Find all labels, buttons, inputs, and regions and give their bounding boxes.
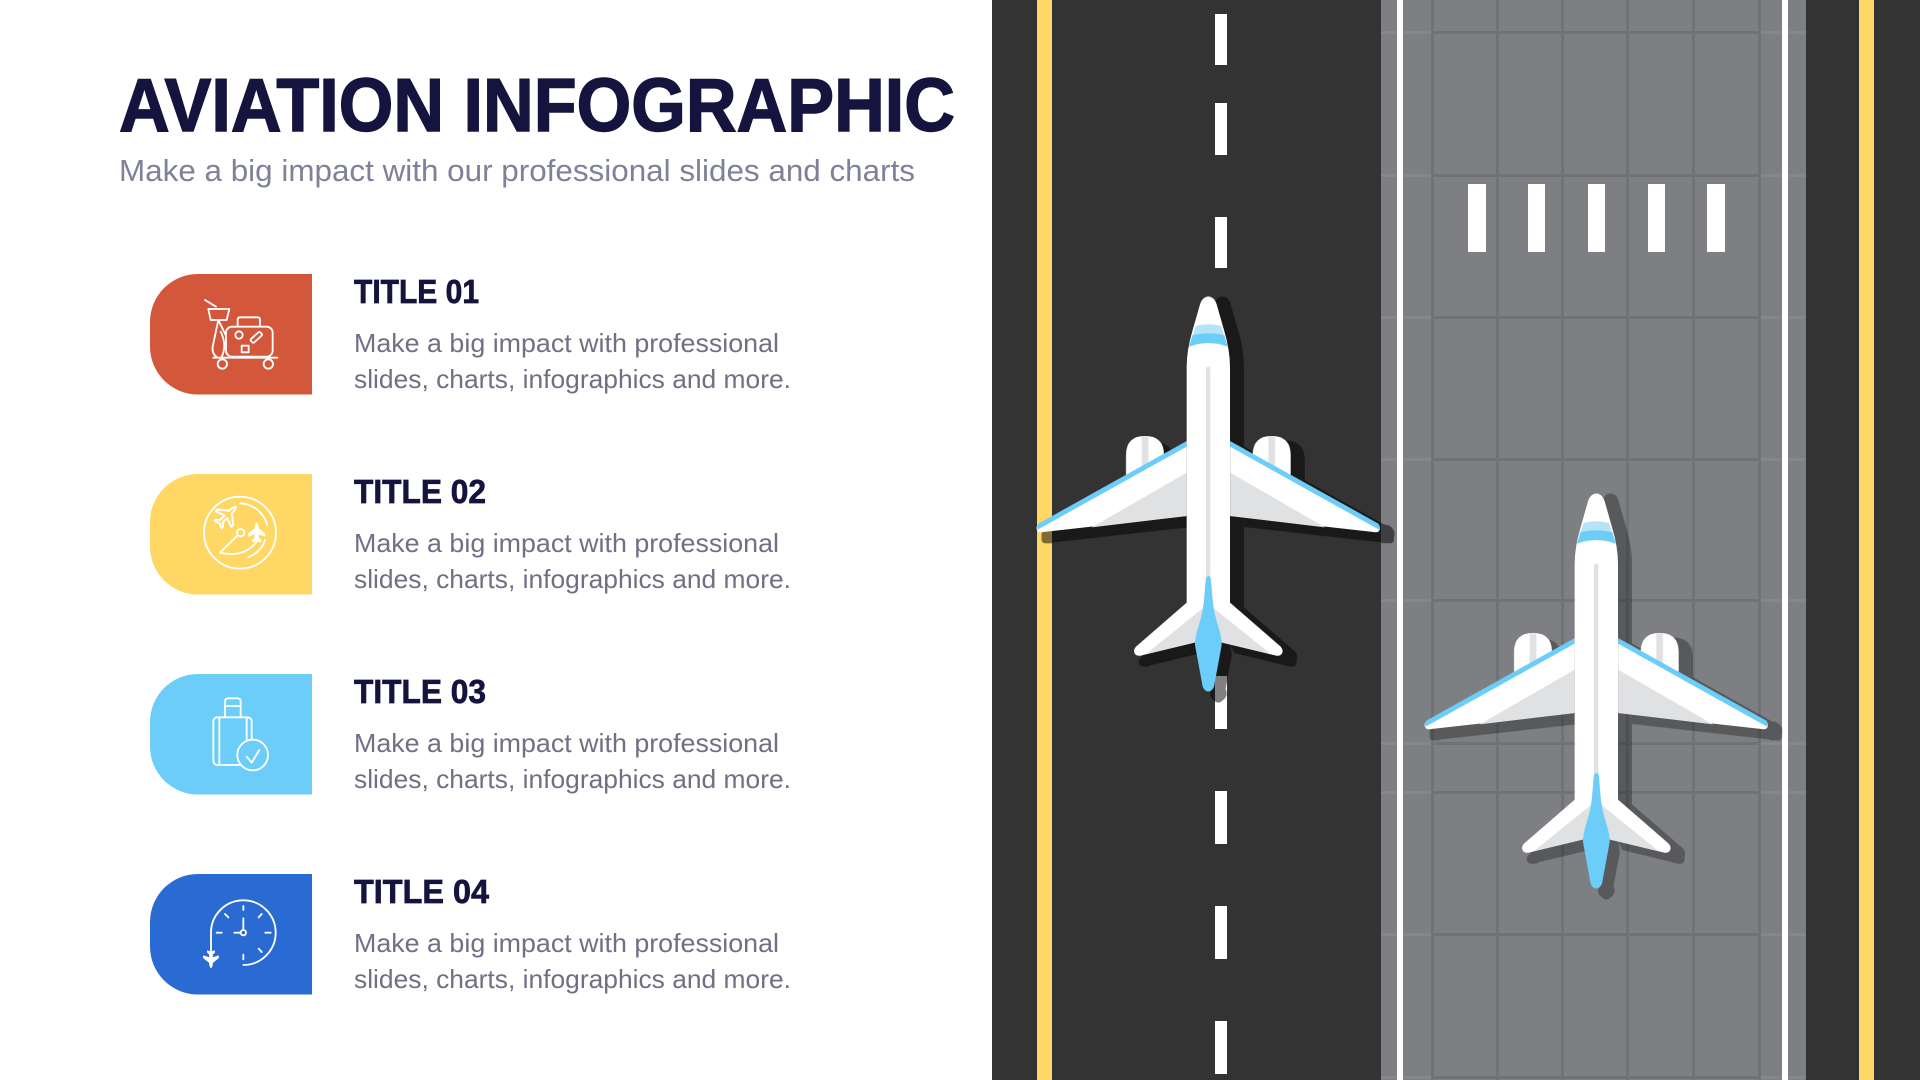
icon: clock with plane path (204, 900, 276, 967)
badge 02 (150, 474, 312, 594)
badge 04 (150, 874, 312, 994)
centre dashes (1215, 14, 1227, 1074)
text 01 line 2: slides, charts, infographics and more. (354, 364, 791, 394)
heading 01: TITLE 01 (354, 273, 479, 310)
text 04 line 2: slides, charts, infographics and more. (354, 964, 791, 994)
text 03 line 2: slides, charts, infographics and more. (354, 764, 791, 794)
yellow edge lines (1037, 0, 1874, 1080)
badge 03 (150, 674, 312, 794)
item 03 (150, 673, 791, 794)
panel: runway scene (992, 0, 1920, 1080)
text 04: Make a big impact with professional (354, 928, 779, 958)
heading 03: TITLE 03 (354, 673, 486, 710)
text 02: Make a big impact with professional (354, 528, 779, 558)
asphalt (992, 0, 1920, 1080)
text 03: Make a big impact with professional (354, 728, 779, 758)
title: AVIATION INFOGRAPHIC (119, 63, 955, 147)
text 02 line 2: slides, charts, infographics and more. (354, 564, 791, 594)
icon: suitcase with check (213, 698, 268, 770)
concrete runway (1381, 0, 1806, 1080)
icon: luggage cart (205, 300, 277, 369)
item 01 (150, 273, 791, 394)
heading 02: TITLE 02 (354, 473, 486, 510)
threshold stripes (1468, 184, 1725, 252)
subtitle: Make a big impact with our professional slides and charts (119, 153, 915, 188)
badge 01 (150, 274, 312, 394)
heading 04: TITLE 04 (354, 873, 490, 910)
text 01: Make a big impact with professional (354, 328, 779, 358)
airplane 1 (1037, 297, 1394, 703)
white edge lines (1397, 0, 1788, 1080)
icon: globe with planes (204, 497, 276, 569)
item 04 (150, 873, 791, 994)
item 02 (150, 473, 791, 594)
airplane 2 (1425, 494, 1782, 900)
